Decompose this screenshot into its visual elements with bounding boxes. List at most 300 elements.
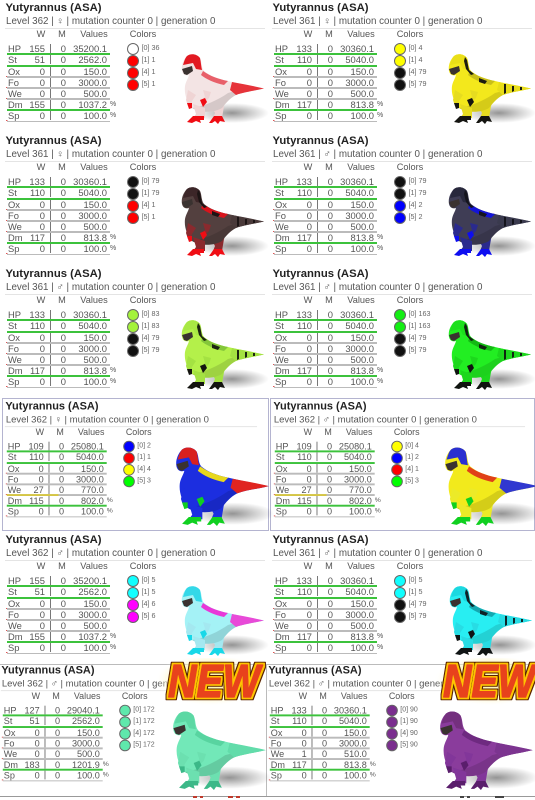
stats table: 0 [328, 308, 333, 320]
stats table: HP [8, 42, 21, 54]
card: purple male level 362: Level 362 | ♂ | mutation counter 0 | generation 0 [269, 678, 472, 689]
card: mint male level 362: Colors [122, 691, 148, 700]
card: black and red female level 361: Values [80, 162, 108, 172]
color swatches [394, 575, 426, 623]
stats table: 155 [29, 630, 45, 642]
stats table: 802.0 [349, 495, 371, 505]
stats table: 0 [326, 451, 332, 462]
stats table: 3000.0 [75, 473, 103, 484]
card: framed yellow multicolor male level 362: Level 362 | ♂ | mutation counter 0 | generation 0 [273, 415, 476, 425]
stats table: St [275, 54, 284, 65]
stats table: 0 [55, 715, 60, 726]
stats table: Ox [271, 726, 282, 737]
card: black and blue male level 361: [4] 2 [408, 200, 422, 209]
card: white and red female level 362: Level 362 | ♀ | mutation counter 0 | generation 0 [6, 16, 215, 27]
stats table: 109 [28, 440, 43, 451]
stats table: Ox [8, 198, 20, 210]
stats table: 0 [61, 620, 66, 630]
card: mint male level 362: Yutyrannus (ASA) [1, 664, 95, 676]
stats table: 0 [61, 376, 66, 387]
card: black and blue male level 361: Colors [397, 162, 423, 172]
stats table: HP [275, 176, 288, 186]
card: green and black male level 361 [272, 268, 533, 390]
stats table: 0 [61, 42, 66, 54]
card: framed yellow multicolor male level 362: Colors [393, 427, 419, 437]
card: black and blue male level 361: M [325, 162, 333, 172]
stats table: 0 [328, 320, 333, 331]
stats table: 133 [29, 308, 45, 320]
stats table: 110 [297, 54, 312, 65]
stats table: 0 [58, 473, 64, 484]
stats table: 1037.2 [78, 630, 107, 642]
card: green and black male level 361: [0] 163 [408, 309, 430, 318]
stats table: HP [7, 440, 20, 451]
card: white and red female level 362: [0] 36 [142, 43, 159, 52]
card: framed blue multicolor female level 362: [4] 4 [137, 464, 150, 473]
card: black and red female level 361: M [58, 162, 66, 172]
stats table: 0 [307, 198, 312, 210]
stats table: Ox [4, 726, 15, 737]
stats table: 5040.0 [78, 187, 107, 198]
stats table: % [374, 508, 380, 514]
stats table: 0 [55, 747, 60, 758]
card: mint male level 362: M [52, 691, 60, 700]
stats table: We [275, 354, 289, 364]
stats table: % [377, 245, 383, 252]
stats table: HP [8, 308, 21, 320]
stats table: % [377, 112, 383, 119]
stats table: 0 [328, 642, 333, 653]
stats table: 0 [326, 473, 332, 484]
stats table: 0 [328, 598, 333, 608]
stats table: 0 [55, 726, 60, 737]
stats table: 0 [40, 243, 45, 254]
stats table: 0 [322, 769, 327, 780]
stats table: 0 [328, 198, 333, 210]
stats table: Fo [8, 76, 19, 88]
stats table: 0 [328, 187, 333, 198]
stats table: 150.0 [351, 198, 374, 210]
stats table: 0 [58, 506, 64, 516]
stats table: 0 [307, 620, 312, 630]
stats table: We [275, 220, 289, 232]
stats table: 500.0 [84, 620, 107, 630]
stats table: Ox [8, 332, 20, 342]
stats table: 100.0 [349, 506, 371, 516]
card: mint male level 362: [1] 172 [133, 716, 155, 725]
stats table: 133 [296, 308, 312, 320]
card: cyan and black male level 361: [5] 79 [408, 611, 426, 620]
card: black and red female level 361: [0] 79 [142, 176, 159, 185]
stats table: % [103, 771, 109, 778]
color swatches [394, 176, 426, 224]
stats table: 0 [328, 586, 333, 597]
stats table: 2562.0 [78, 54, 107, 65]
card: framed blue multicolor female level 362: Yutyrannus (ASA) [5, 401, 98, 413]
stats table: % [377, 100, 383, 108]
card: black and blue male level 361: [0] 79 [408, 176, 426, 185]
card: green and black male level 361: Colors [397, 295, 423, 305]
stats table: 0 [328, 66, 333, 76]
card: cyan and magenta male level 362: W [37, 561, 45, 571]
stats table: 0 [328, 574, 333, 586]
stats table: 100.0 [84, 243, 107, 254]
stats table: St [275, 451, 284, 462]
stats table: 0 [322, 737, 327, 747]
card: cyan and magenta male level 362: Colors [130, 561, 156, 571]
stats table: 0 [322, 704, 327, 714]
card: black and red female level 361: Yutyrannus (ASA) [6, 135, 102, 147]
stats table: % [377, 378, 383, 385]
stats table: 150.0 [84, 198, 107, 210]
stats table: 0 [328, 608, 333, 620]
stats table: 3000.0 [339, 737, 367, 747]
stats table: Dm [8, 630, 23, 642]
stats table: 30360.1 [73, 308, 107, 320]
card: framed blue multicolor female level 362 [5, 401, 270, 526]
stats table: Sp [275, 506, 286, 516]
dinosaur: cyan and magenta [182, 586, 266, 656]
stats table: 770.0 [349, 484, 371, 495]
stats table: 3000.0 [345, 608, 374, 620]
stats table: 30360.1 [340, 308, 374, 320]
card: purple male level 362: [0] 90 [400, 704, 418, 713]
color swatches [394, 309, 430, 357]
stats table: We [275, 484, 289, 495]
card: yellow and black female level 361: Yutyrannus (ASA) [272, 2, 369, 14]
stats table: 500.0 [84, 88, 107, 98]
stats table: % [110, 100, 116, 108]
card: white and red female level 362: Colors [130, 29, 156, 39]
stats table: 0 [61, 320, 66, 331]
card: lime and black male level 361: Yutyrannus (ASA) [6, 268, 102, 280]
stats table: 0 [307, 110, 312, 121]
stats table: 150.0 [351, 66, 374, 76]
stats table: 0 [328, 76, 333, 88]
dinosaur: purple [427, 706, 535, 796]
card: cyan and magenta male level 362: Level 362 | ♂ | mutation counter 0 | generation 0 [6, 548, 215, 559]
stats table: 109 [296, 440, 311, 451]
stats table: 0 [61, 342, 66, 354]
card: green and black male level 361: M [325, 295, 333, 305]
card: yellow and black female level 361: Colors [397, 29, 423, 39]
stats table: Dm [8, 232, 23, 242]
stats table: 0 [328, 332, 333, 342]
card: green and black male level 361: [4] 79 [408, 333, 426, 342]
stats table: 0 [40, 210, 45, 220]
stats table: 802.0 [81, 495, 103, 505]
stats table: 0 [328, 630, 333, 642]
stats table: 5040.0 [345, 187, 374, 198]
card: black and blue male level 361: [5] 2 [408, 212, 422, 221]
color swatches [263, 662, 379, 784]
stats table: 0 [40, 376, 45, 387]
stats table: 150.0 [81, 463, 103, 473]
stats table: 0 [35, 769, 40, 780]
stats table: 150.0 [351, 598, 374, 608]
stats table: Fo [275, 473, 286, 484]
stats table: 0 [326, 463, 332, 473]
card: lime and black male level 361: Values [80, 295, 108, 305]
stats table: Sp [8, 376, 19, 387]
stats table: 0 [307, 598, 312, 608]
card: yellow and black female level 361: Level 361 | ♀ | mutation counter 0 | generation 0 [273, 16, 482, 27]
card: black and blue male level 361: [1] 79 [408, 188, 426, 197]
stats table [274, 440, 380, 518]
stats table: 500.0 [84, 354, 107, 364]
stats table: Dm [275, 364, 290, 376]
stats table: 0 [307, 66, 312, 76]
card: framed blue multicolor female level 362: Colors [125, 427, 151, 437]
stats table: 813.8 [351, 364, 374, 376]
stats table: 150.0 [84, 66, 107, 76]
card: yellow and black female level 361: Values [347, 29, 375, 39]
stats table: 0 [38, 473, 43, 484]
card: yellow and black female level 361 [272, 2, 533, 124]
card: framed blue multicolor female level 362: Level 362 | ♀ | mutation counter 0 | generation 0 [5, 415, 208, 425]
card: white and red female level 362 [5, 2, 266, 124]
stats table: 813.8 [351, 232, 374, 242]
bottom edge specks [0, 795, 535, 800]
stats table: 110 [297, 320, 312, 331]
stats table: % [110, 112, 116, 119]
dinosaur: black and blue [448, 187, 533, 257]
card: yellow and black female level 361: [4] 79 [408, 67, 426, 76]
stats table: 0 [61, 243, 66, 254]
stats table: 155 [29, 98, 45, 110]
stats table: 0 [61, 176, 66, 186]
card: mint male level 362: Level 362 | ♂ | mutation counter 0 | generation 0 [2, 678, 205, 689]
card: black and red female level 361: Level 361 | ♀ | mutation counter 0 | generation 0 [6, 149, 215, 160]
stats table [263, 662, 379, 784]
stats table: 150.0 [84, 332, 107, 342]
stats table: 0 [58, 451, 64, 462]
stats table: 35200.1 [73, 42, 107, 54]
stats table: HP [271, 704, 283, 714]
stats table: % [377, 234, 383, 240]
stats table: 0 [38, 506, 43, 516]
stats table: % [370, 771, 376, 778]
card: green and black male level 361: Yutyrannus (ASA) [272, 268, 369, 280]
stats table: 0 [326, 440, 332, 451]
stats table: 3000.0 [78, 76, 107, 88]
stats table: Ox [7, 463, 19, 473]
card: black and blue male level 361 [272, 135, 533, 257]
card: lime and black male level 361: W [37, 295, 45, 305]
stats table: St [4, 715, 12, 726]
stats table: 25080.1 [338, 440, 371, 451]
card: framed yellow multicolor male level 362: Yutyrannus (ASA) [273, 401, 366, 413]
stats table: 0 [55, 704, 60, 714]
stats table: 0 [322, 747, 327, 758]
stats table: 3000.0 [345, 76, 374, 88]
stats table: We [7, 484, 21, 495]
stats table: Ox [275, 463, 287, 473]
card: purple male level 362: Yutyrannus (ASA) [268, 664, 362, 676]
stats table: 5040.0 [78, 320, 107, 331]
stats table: 0 [302, 769, 307, 780]
card: cyan and black male level 361: M [325, 561, 333, 571]
stats table: 0 [58, 463, 64, 473]
stats table: 117 [297, 364, 312, 376]
stats table: 117 [297, 630, 312, 642]
card: cyan and magenta male level 362: [1] 5 [142, 587, 156, 596]
stats table: 110 [292, 715, 307, 726]
stats table: 100.0 [84, 642, 107, 653]
stats table: 0 [328, 210, 333, 220]
stats table: St [8, 320, 17, 331]
card: black and red female level 361: Colors [130, 162, 156, 172]
stats table: 0 [306, 463, 311, 473]
stats table: Fo [275, 76, 286, 88]
card: purple male level 362: Colors [389, 691, 415, 700]
stats table: 30360.1 [340, 42, 374, 54]
stats table: 0 [307, 76, 312, 88]
stats table: 813.8 [344, 758, 367, 769]
stats table: 133 [296, 574, 312, 586]
stats table: Sp [271, 769, 282, 780]
card: yellow and black female level 361: M [325, 29, 333, 39]
stats table: 0 [38, 463, 43, 473]
stats table: We [275, 620, 289, 630]
stats table: % [377, 632, 383, 640]
stats table: % [110, 245, 116, 252]
stats table: HP [4, 704, 16, 714]
card: lime and black male level 361: M [58, 295, 66, 305]
stats table: 0 [307, 210, 312, 220]
stats table [0, 662, 112, 784]
stats table: 0 [40, 198, 45, 210]
stats table: 110 [297, 187, 312, 198]
card: black and blue male level 361: Level 361 | ♂ | mutation counter 0 | generation 0 [273, 149, 482, 160]
card: black and blue male level 361: Values [347, 162, 375, 172]
stats table: % [377, 366, 383, 374]
stats table [6, 176, 116, 255]
card: framed yellow multicolor male level 362: [0] 4 [405, 441, 418, 449]
stats table: Sp [8, 110, 19, 121]
card: framed yellow multicolor male level 362: Values [345, 427, 372, 437]
frame: fourth row right [270, 398, 535, 531]
stats table: 5040.0 [345, 54, 374, 65]
stats table: Dm [275, 495, 289, 505]
stats table: 0 [307, 608, 312, 620]
stats table: 110 [30, 187, 45, 198]
card: green and black male level 361: [5] 79 [408, 345, 426, 354]
stats table: 0 [328, 88, 333, 98]
stats table [273, 574, 383, 654]
stats table: Fo [4, 737, 14, 747]
stats table: 155 [29, 574, 45, 586]
stats table: 0 [40, 110, 45, 121]
stats table [6, 440, 112, 518]
card: framed blue multicolor female level 362: Values [77, 427, 104, 437]
stats table: 51 [35, 54, 45, 65]
card: green and black male level 361: [1] 163 [408, 321, 430, 330]
card: lime and black male level 361: [0] 83 [142, 309, 159, 318]
stats table: St [275, 586, 284, 597]
card: black and red female level 361 [5, 135, 266, 257]
stats table: 150.0 [351, 332, 374, 342]
stats table: 0 [40, 608, 45, 620]
stats table: 0 [306, 506, 311, 516]
stats table: Sp [8, 642, 19, 653]
stats table: Fo [8, 210, 19, 220]
card: cyan and black male level 361: [1] 5 [408, 587, 422, 596]
stats table: % [374, 496, 380, 503]
color swatches [127, 575, 156, 623]
stats table: Ox [275, 598, 287, 608]
card: green and black male level 361: W [304, 295, 312, 305]
stats table: 0 [35, 737, 40, 747]
stats table: 27 [301, 484, 311, 495]
stats table: 30360.1 [73, 176, 107, 186]
stats table: St [7, 451, 16, 462]
dinosaur: lime and black [182, 320, 266, 390]
stats table: HP [8, 574, 21, 586]
stats table: 500.0 [351, 620, 374, 630]
stats table: 0 [35, 747, 40, 758]
stats table: 0 [328, 110, 333, 121]
stats table: Sp [275, 243, 286, 254]
stats table: We [275, 88, 289, 98]
card: framed yellow multicolor male level 362: [4] 1 [405, 464, 418, 473]
stats table: 500.0 [84, 220, 107, 232]
card: cyan and magenta male level 362: Values [80, 561, 108, 571]
color swatches [123, 440, 151, 488]
stats table: 0 [40, 342, 45, 354]
stats table: 155 [29, 42, 45, 54]
stats table: 0 [306, 473, 311, 484]
stats table: We [271, 747, 284, 758]
card: cyan and black male level 361 [272, 534, 534, 656]
stats table: 500.0 [351, 354, 374, 364]
stats table: 5040.0 [345, 320, 374, 331]
stats table: 117 [297, 232, 312, 242]
stats table: % [110, 366, 116, 374]
card: yellow and black female level 361: W [304, 29, 312, 39]
card: mint male level 362: [5] 172 [133, 739, 155, 748]
stats table: 0 [61, 98, 66, 110]
dinosaur: black and red [182, 187, 266, 257]
stats table: 3000.0 [345, 342, 374, 354]
card: yellow and black female level 361: [0] 4 [408, 43, 422, 52]
stats table: Dm [8, 98, 23, 110]
stats table: 133 [291, 704, 307, 714]
card: black and blue male level 361: W [304, 162, 312, 172]
card: purple male level 362: Values [341, 691, 367, 700]
stats table: % [110, 644, 116, 651]
stats table [273, 176, 383, 255]
stats table: 0 [61, 574, 66, 586]
stats table: 0 [307, 243, 312, 254]
stats table: 813.8 [84, 232, 107, 242]
card: black and red female level 361: [1] 79 [142, 188, 159, 197]
card: lime and black male level 361: [5] 79 [142, 345, 159, 354]
stats table: 0 [326, 495, 332, 505]
stats table: 150.0 [84, 598, 107, 608]
stats table: 0 [58, 440, 64, 451]
card: lime and black male level 361 [5, 268, 266, 390]
stats table: Sp [275, 642, 286, 653]
stats table: Dm [275, 630, 290, 642]
card: white and red female level 362: Yutyrannus (ASA) [6, 2, 102, 14]
stats table: 0 [61, 210, 66, 220]
stats table: St [275, 187, 284, 198]
stats table: HP [275, 574, 288, 586]
stats table: HP [8, 176, 21, 186]
card: black and red female level 361: W [37, 162, 45, 172]
card: green and black male level 361: Values [347, 295, 375, 305]
